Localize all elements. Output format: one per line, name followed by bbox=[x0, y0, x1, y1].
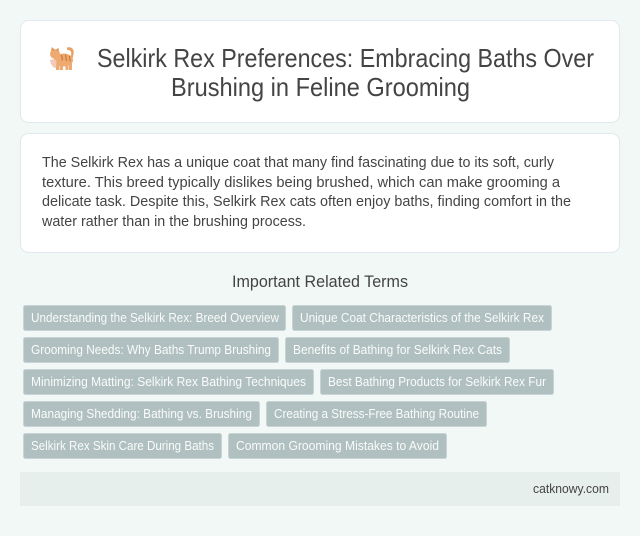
tag: Unique Coat Characteristics of the Selkirk Rex bbox=[300, 310, 545, 325]
tag bbox=[24, 306, 286, 330]
tag: Understanding the Selkirk Rex: Breed Overview bbox=[31, 310, 280, 325]
tag bbox=[266, 402, 486, 426]
panel: title card bbox=[20, 20, 620, 122]
tag bbox=[24, 370, 314, 394]
footer: catknowy.com bbox=[533, 481, 609, 496]
tag bbox=[24, 402, 260, 426]
tag: Benefits of Bathing for Selkirk Rex Cats bbox=[293, 342, 502, 357]
tag: Managing Shedding: Bathing vs. Brushing bbox=[31, 406, 252, 421]
tag: Common Grooming Mistakes to Avoid bbox=[236, 438, 439, 453]
panel: intro text: texture. This breed typically dislikes being brushed, which can make grooming a bbox=[42, 174, 561, 191]
title: Selkirk Rex Preferences: Embracing Baths Over bbox=[97, 45, 594, 73]
panel: intro text: water rather than in the brushing process. bbox=[41, 213, 306, 230]
footer bbox=[20, 472, 620, 506]
panel: intro text: The Selkirk Rex has a unique coat that many find fascinating due to its soft, curly bbox=[42, 154, 554, 171]
tag: Creating a Stress-Free Bathing Routine bbox=[274, 406, 479, 421]
tag bbox=[286, 338, 510, 362]
tag bbox=[228, 434, 446, 458]
tag: Selkirk Rex Skin Care During Baths bbox=[31, 438, 214, 453]
tag bbox=[320, 370, 554, 394]
heading: related terms: Important Related Terms bbox=[232, 273, 408, 291]
tag: Grooming Needs: Why Baths Trump Brushing bbox=[31, 342, 271, 357]
panel: intro text bbox=[20, 134, 620, 252]
title: Brushing in Feline Grooming bbox=[171, 74, 470, 102]
tag: Minimizing Matting: Selkirk Rex Bathing Techniques bbox=[31, 374, 306, 389]
tag bbox=[24, 338, 278, 362]
tag bbox=[24, 434, 222, 458]
panel: intro text: delicate task. Despite this, Selkirk Rex cats often enjoy baths, finding comfort in the bbox=[42, 193, 571, 210]
tag bbox=[292, 306, 552, 330]
tag list bbox=[24, 306, 554, 458]
icon: orange cat bbox=[50, 47, 74, 70]
title bbox=[97, 45, 594, 102]
tag: Best Bathing Products for Selkirk Rex Fur bbox=[328, 374, 547, 389]
